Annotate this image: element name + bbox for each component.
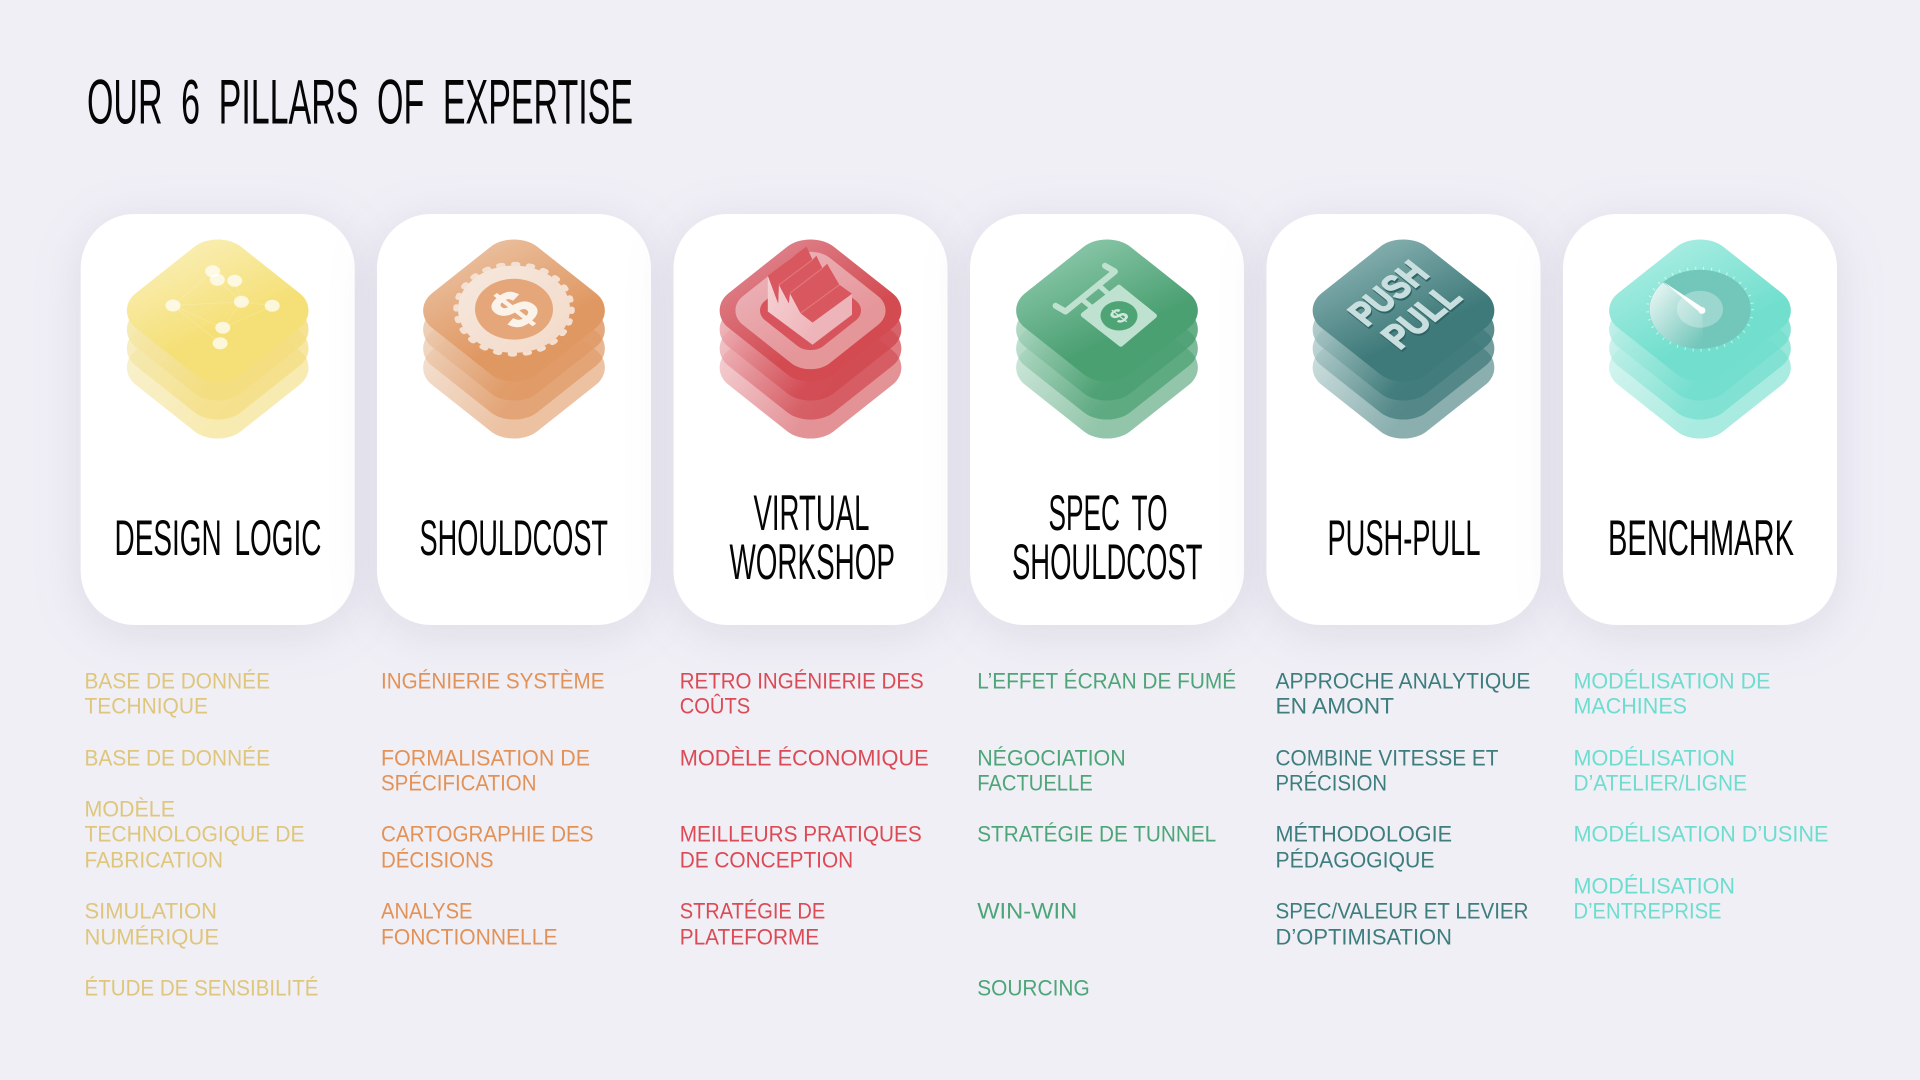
- list: benchmark: MODÉLISATION DE: [1574, 668, 1770, 694]
- card background: [1266, 214, 1540, 625]
- panel: design logic: [81, 214, 355, 625]
- icon: red stacked factory: [720, 239, 901, 439]
- icon: green stacked price tag: [1016, 239, 1198, 439]
- heading: shouldcost: SHOULDCOST: [420, 510, 608, 566]
- list: virtual workshop: DE CONCEPTION: [680, 848, 853, 872]
- card background: [970, 214, 1244, 625]
- panel: shouldcost: [377, 214, 651, 625]
- panel: push-pull: [1266, 214, 1540, 625]
- list: push-pull: EN AMONT: [1276, 694, 1394, 718]
- list: virtual workshop: RETRO INGÉNIERIE DES: [680, 668, 924, 694]
- list: spec to shouldcost: SOURCING: [977, 976, 1090, 1000]
- list: push-pull: [1276, 668, 1530, 950]
- heading: spec to shouldcost: SHOULDCOST: [1012, 534, 1202, 590]
- list: design logic: SIMULATION: [84, 898, 217, 924]
- list: design logic: NUMÉRIQUE: [84, 924, 219, 950]
- heading: virtual workshop: [730, 485, 895, 590]
- list: spec to shouldcost: STRATÉGIE DE TUNNEL: [977, 822, 1216, 846]
- list: spec to shouldcost: L’EFFET ÉCRAN DE FUMÉ: [977, 668, 1236, 694]
- icon: teal stacked push pull: [1313, 239, 1494, 439]
- list: push-pull: PRÉCISION: [1276, 770, 1387, 796]
- icon: green stacked price tag: $: [1104, 304, 1134, 328]
- list: benchmark: MODÉLISATION: [1574, 874, 1735, 898]
- card background: [674, 214, 948, 625]
- list: shouldcost: [381, 668, 604, 950]
- list: shouldcost: FONCTIONNELLE: [381, 924, 557, 950]
- panel: virtual workshop: [674, 214, 948, 625]
- list: virtual workshop: MODÈLE ÉCONOMIQUE: [680, 746, 929, 770]
- list: benchmark: MACHINES: [1574, 694, 1687, 718]
- list: shouldcost: INGÉNIERIE SYSTÈME: [381, 668, 604, 694]
- list: push-pull: APPROCHE ANALYTIQUE: [1276, 668, 1530, 694]
- list: virtual workshop: MEILLEURS PRATIQUES: [680, 822, 922, 846]
- list: shouldcost: SPÉCIFICATION: [381, 770, 536, 796]
- list: benchmark: MODÉLISATION D’USINE: [1574, 822, 1828, 846]
- card background: [1563, 214, 1837, 625]
- list: push-pull: D’OPTIMISATION: [1276, 924, 1452, 950]
- list: benchmark: D’ATELIER/LIGNE: [1574, 770, 1747, 796]
- title: OUR 6 PILLARS OF EXPERTISE: [87, 68, 633, 138]
- list: benchmark: MODÉLISATION: [1574, 746, 1735, 770]
- list: virtual workshop: PLATEFORME: [680, 924, 819, 950]
- list: design logic: MODÈLE: [84, 796, 175, 822]
- list: spec to shouldcost: [977, 668, 1236, 1000]
- list: design logic: ÉTUDE DE SENSIBILITÉ: [84, 976, 318, 1000]
- heading: spec to shouldcost: SPEC TO: [1048, 485, 1168, 541]
- list: design logic: TECHNIQUE: [84, 694, 208, 718]
- list: push-pull: PÉDAGOGIQUE: [1276, 848, 1434, 872]
- icon: teal stacked push pull: PULL: [1373, 278, 1470, 356]
- icon: aqua stacked dial: [1609, 239, 1791, 439]
- panel: benchmark: [1563, 214, 1837, 625]
- list: virtual workshop: COÛTS: [680, 694, 750, 718]
- list: design logic: [84, 668, 318, 1000]
- list: push-pull: SPEC/VALEUR ET LEVIER: [1276, 898, 1528, 924]
- list: spec to shouldcost: WIN-WIN: [977, 898, 1077, 924]
- list: benchmark: [1574, 668, 1828, 924]
- list: design logic: FABRICATION: [84, 848, 223, 872]
- list: design logic: TECHNOLOGIQUE DE: [84, 822, 304, 846]
- list: virtual workshop: STRATÉGIE DE: [680, 898, 825, 924]
- list: spec to shouldcost: FACTUELLE: [977, 770, 1093, 796]
- heading: push-pull: PUSH-PULL: [1328, 510, 1480, 566]
- list: spec to shouldcost: NÉGOCIATION: [977, 746, 1126, 770]
- list: push-pull: MÉTHODOLOGIE: [1276, 822, 1452, 846]
- icon: teal stacked push pull: PUSH: [1340, 254, 1438, 333]
- card background: [377, 214, 651, 625]
- list: benchmark: D’ENTREPRISE: [1574, 898, 1722, 924]
- icon: orange stacked gear with dollar: $: [475, 279, 554, 340]
- list: shouldcost: CARTOGRAPHIE DES: [381, 822, 593, 846]
- heading: spec to shouldcost: [1012, 485, 1202, 590]
- panel: spec to shouldcost: [970, 214, 1244, 625]
- heading: virtual workshop: VIRTUAL: [754, 485, 870, 541]
- list: shouldcost: FORMALISATION DE: [381, 746, 590, 770]
- list: virtual workshop: [680, 668, 929, 950]
- list: shouldcost: ANALYSE: [381, 898, 472, 924]
- heading: benchmark: BENCHMARK: [1608, 510, 1794, 566]
- icon: yellow stacked network: [127, 239, 309, 439]
- list: push-pull: COMBINE VITESSE ET: [1276, 746, 1498, 770]
- card background: [81, 214, 355, 625]
- list: design logic: BASE DE DONNÉE: [84, 746, 270, 770]
- icon: orange stacked gear with dollar: [423, 239, 605, 439]
- heading: design logic: DESIGN LOGIC: [114, 510, 322, 566]
- list: shouldcost: DÉCISIONS: [381, 848, 493, 872]
- list: design logic: BASE DE DONNÉE: [84, 668, 270, 694]
- heading: virtual workshop: WORKSHOP: [730, 534, 895, 590]
